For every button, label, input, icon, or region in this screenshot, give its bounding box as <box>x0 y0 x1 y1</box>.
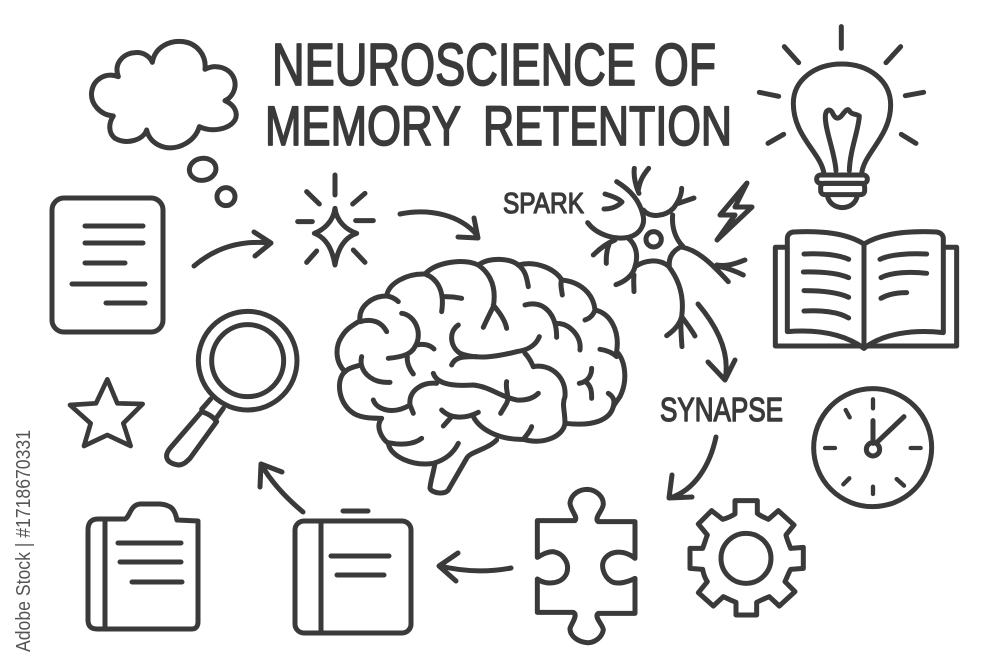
icon: light bulb <box>759 27 924 208</box>
title: NEUROSCIENCE <box>272 32 636 98</box>
label: spark: SPARK <box>503 188 585 220</box>
icon: gear <box>690 501 803 615</box>
icon: neuron <box>588 168 745 347</box>
icon: magnifying glass <box>167 311 297 465</box>
label: synapse: SYNAPSE <box>660 391 783 428</box>
arrow: document to spark <box>194 232 271 266</box>
icon: chevron pointer <box>604 194 622 209</box>
icon: open book <box>775 232 957 348</box>
arrow: synapse to puzzle <box>669 437 716 498</box>
icon: document <box>52 198 163 332</box>
icon: brain <box>337 259 625 493</box>
icon: sparkle <box>298 175 373 265</box>
icon: star <box>70 379 143 446</box>
icon: clipboard notes <box>88 504 198 629</box>
title <box>265 32 732 157</box>
arrow: puzzle to book <box>439 553 511 581</box>
watermark id: Adobe Stock | #1718670331 <box>13 430 35 652</box>
arrow: spark to brain <box>400 212 478 238</box>
icon: clock <box>814 389 932 507</box>
title: MEMORY <box>265 94 461 157</box>
icon: lightning bolt <box>717 183 752 240</box>
title: OF <box>654 32 716 98</box>
icon: closed book <box>295 511 411 633</box>
icon: puzzle piece <box>537 489 635 643</box>
arrow: book to magnifier <box>260 464 303 512</box>
icon: thought cloud <box>91 41 236 206</box>
arrow: neuron to synapse <box>698 304 735 380</box>
title: RETENTION <box>483 94 732 157</box>
